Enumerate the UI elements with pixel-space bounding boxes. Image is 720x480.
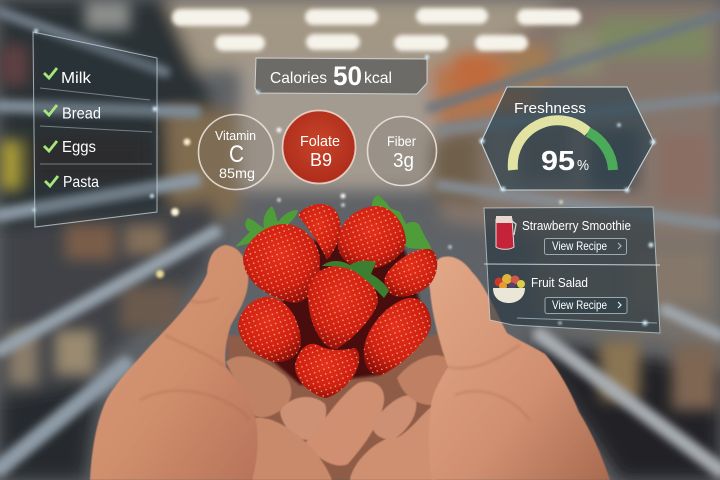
strawberry top right — [338, 206, 406, 269]
item: Milk — [44, 68, 92, 87]
nutrient circle: Fiber 3g: 3g — [393, 150, 414, 172]
leaves — [235, 195, 432, 250]
hand: left palm and thumb — [90, 245, 258, 480]
nutrient circle: Fiber 3g: Fiber — [387, 133, 416, 149]
nutrient circle: Folate B9: Folate — [300, 133, 340, 150]
nutrient circle: Vitamin C: Vitamin — [215, 129, 256, 143]
strawberry lower right — [364, 298, 431, 375]
strawberry lower left — [238, 297, 301, 362]
gauge arc — [513, 120, 613, 170]
icon: fruit bowl — [493, 274, 525, 303]
button: View Recipe: View Recipe — [552, 298, 607, 312]
item: Pasta — [45, 174, 99, 191]
recipe: Fruit Salad — [493, 274, 627, 314]
nutrient circle: Vitamin C — [198, 114, 274, 190]
panel: freshness gauge: % — [577, 157, 589, 174]
nutrient circle: Vitamin C: 85mg — [219, 165, 255, 181]
leaves on centre strawberry — [322, 261, 389, 298]
glowing sparkles — [32, 29, 656, 326]
nutrient circle: Folate B9: B9 — [310, 150, 332, 170]
hand: right palm and thumb — [429, 257, 610, 480]
panel: shopping checklist — [33, 32, 157, 227]
item: Eggs — [44, 139, 96, 156]
recipe: Strawberry Smoothie: Strawberry Smoothie — [522, 218, 631, 233]
panel: freshness gauge: Freshness — [514, 100, 586, 117]
panel: recipes — [484, 207, 660, 333]
hand: creases — [140, 298, 530, 420]
item: Pasta: Pasta — [63, 174, 99, 191]
hands holding strawberries — [90, 245, 610, 480]
recipe: Fruit Salad: Fruit Salad — [531, 275, 588, 290]
strawberry far right — [384, 249, 437, 297]
strawberry shadow base — [260, 240, 425, 385]
hand: inner fingers — [226, 355, 448, 480]
nutrient circle: Fiber 3g — [368, 116, 436, 186]
strawberry large left — [243, 224, 320, 303]
panel: calories: Calories — [270, 70, 327, 87]
strawberry bottom centre — [295, 344, 359, 398]
hand: shadow base between fingers — [226, 330, 452, 480]
item: Bread — [44, 105, 101, 122]
item: Bread: Bread — [62, 106, 101, 122]
nutrient circle: Vitamin C: C — [229, 141, 244, 168]
panel: calories: kcal — [364, 70, 392, 87]
strawberry centre — [308, 265, 378, 349]
button: View Recipe: View Recipe — [552, 239, 607, 253]
panel: freshness gauge — [481, 87, 654, 190]
recipe: Strawberry Smoothie — [496, 216, 631, 254]
strawberries — [235, 195, 437, 398]
strawberry back top — [298, 204, 341, 260]
panel: freshness gauge: 95 — [541, 145, 575, 176]
panel: calories — [255, 58, 427, 94]
item: Milk: Milk — [61, 70, 92, 87]
icon: smoothie jug — [496, 216, 516, 249]
nutrient circle: Folate B9 — [282, 110, 356, 184]
item: Eggs: Eggs — [62, 139, 96, 156]
panel: calories: 50 — [333, 61, 362, 91]
